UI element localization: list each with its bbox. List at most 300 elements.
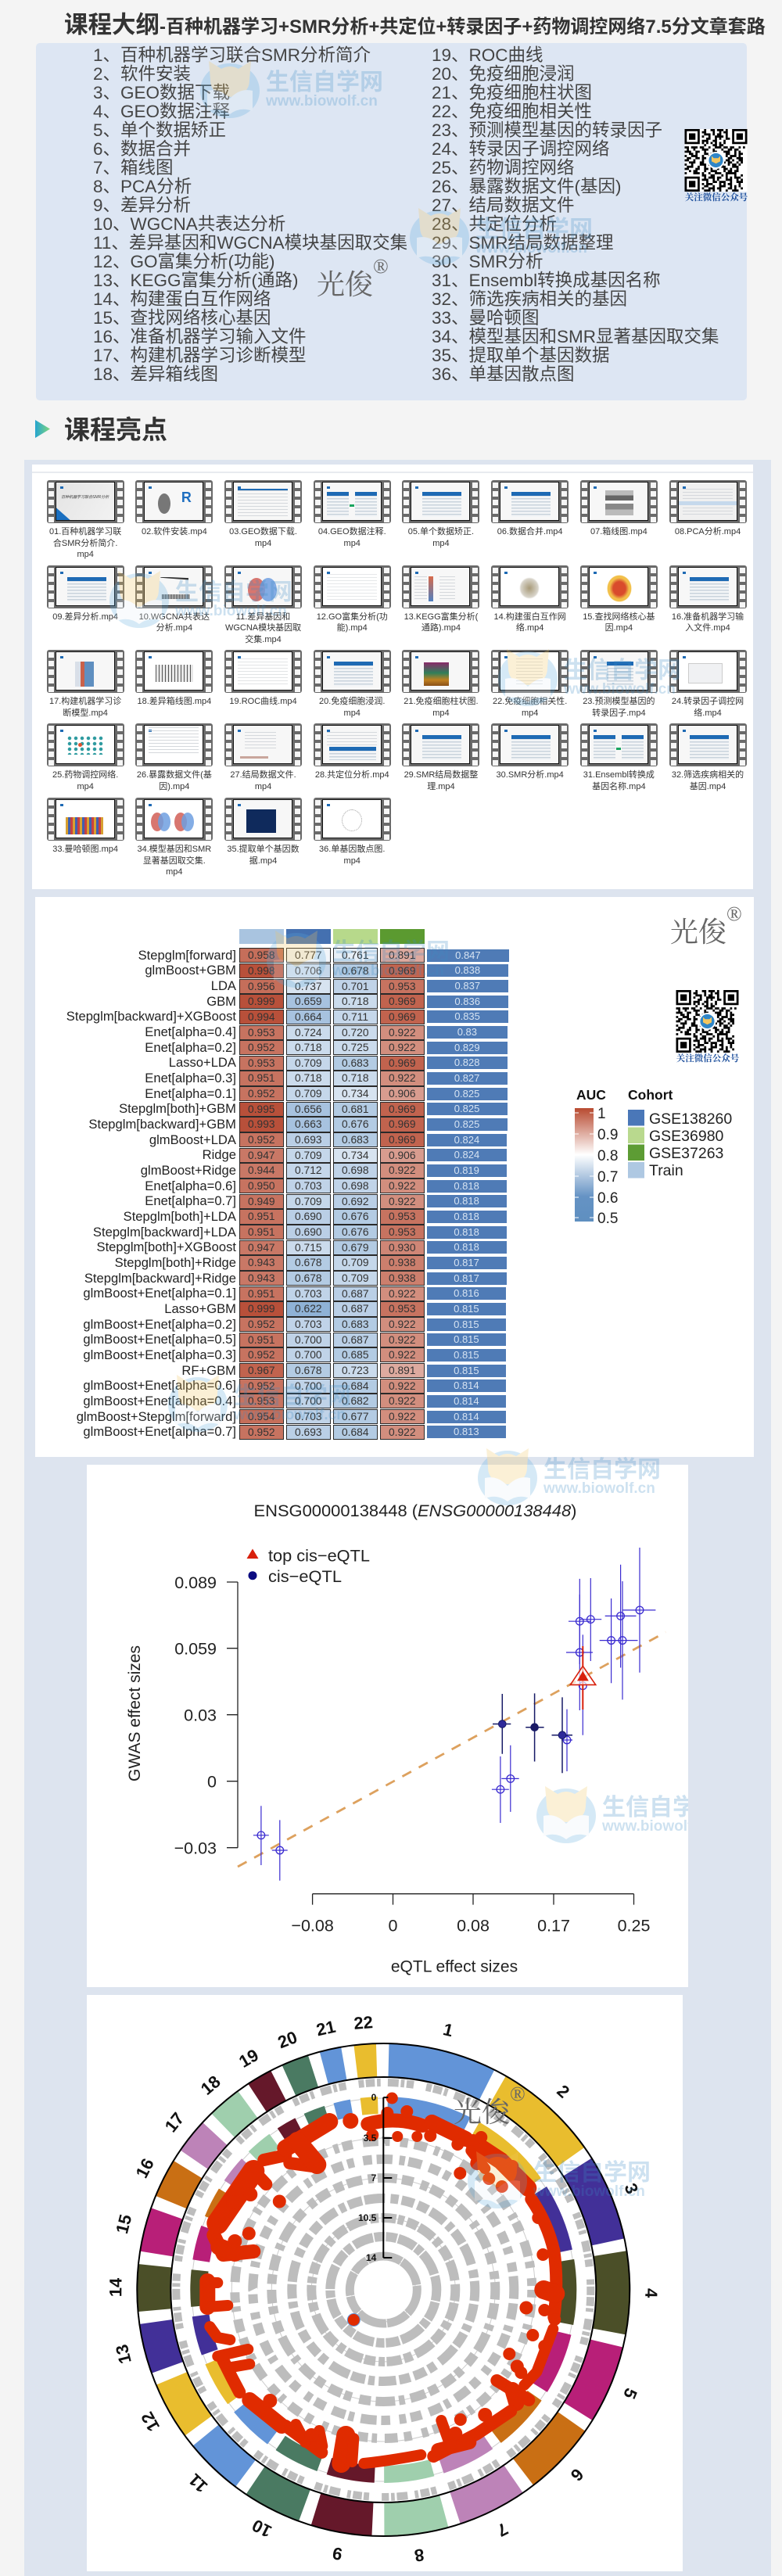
heatmap and mean AUC bars: 0.951 <box>248 1072 275 1084</box>
thumb 33: 33.曼哈顿图.mp4 <box>52 845 118 854</box>
heatmap and mean AUC bars: 0.825 <box>454 1118 479 1130</box>
heatmap and mean AUC bars: 0.720 <box>342 1027 369 1039</box>
outline list column 2: 33、曼哈顿图 <box>432 308 540 328</box>
thumb 09: 09.差异分析.mp4 <box>52 612 118 621</box>
outline list column 2: 29、SMR结局数据整理 <box>432 233 614 253</box>
thumb 08: 08.PCA分析.mp4 <box>675 527 741 536</box>
legend: AUC colour bar: 0.7 <box>597 1169 618 1186</box>
heatmap and mean AUC bars: 0.690 <box>295 1226 322 1238</box>
watermark 5: www.biowolf.cn <box>332 963 444 979</box>
heatmap and mean AUC bars: 0.818 <box>454 1241 479 1253</box>
heatmap and mean AUC bars: 0.828 <box>454 1057 479 1068</box>
watermark 7 <box>477 1444 665 1508</box>
SMR effect size scatter plot: −0.03 <box>174 1839 217 1858</box>
heatmap and mean AUC bars: 0.703 <box>295 1288 322 1300</box>
thumb 21: 21.免疫细胞柱状图. <box>404 697 479 706</box>
heatmap and mean AUC bars: 0.938 <box>389 1257 416 1268</box>
heatmap and mean AUC bars: 0.715 <box>295 1242 322 1254</box>
thumb 34: 34.模型基因和SMR <box>137 845 211 854</box>
thumb 25: 25.药物调控网络. <box>52 770 118 780</box>
thumb 12: 能).mp4 <box>337 623 368 633</box>
heatmap and mean AUC bars: RF+GBM <box>181 1363 236 1378</box>
heatmap and mean AUC bars: 0.718 <box>342 996 369 1007</box>
heatmap and mean AUC bars: 0.993 <box>248 1118 275 1130</box>
QR code: heatmap <box>676 990 740 1064</box>
watermark 8 <box>536 1781 688 1846</box>
outline list column 2: 28、共定位分析 <box>432 214 557 234</box>
heatmap and mean AUC bars: 0.958 <box>248 949 275 961</box>
outline list column 2: 22、免疫细胞相关性 <box>432 102 592 121</box>
watermark 5 <box>266 926 454 990</box>
heatmap and mean AUC bars: 0.685 <box>342 1349 369 1361</box>
circular Manhattan plot: 7 <box>371 2172 377 2183</box>
thumb 27: mp4 <box>255 782 271 791</box>
trademark: outline: 光俊 <box>317 263 373 303</box>
heatmap and mean AUC bars: 0.815 <box>454 1318 479 1330</box>
thumb 02: 02.软件安装.mp4 <box>142 527 207 536</box>
heatmap and mean AUC bars: 0.683 <box>342 1318 369 1330</box>
outline list column 2: 19、ROC曲线 <box>432 45 543 65</box>
watermark 9: 生信自学网 <box>533 2153 651 2187</box>
thumb 17 <box>47 650 124 718</box>
heatmap and mean AUC bars: 0.684 <box>342 1426 369 1438</box>
heatmap and mean AUC bars: 0.922 <box>389 1180 416 1192</box>
thumb 31: 基因名称.mp4 <box>592 782 646 791</box>
thumb 13: 13.KEGG富集分析( <box>404 612 478 621</box>
heatmap and mean AUC bars: 0.967 <box>248 1365 275 1376</box>
thumb 32: 32.筛选疾病相关的 <box>672 770 744 780</box>
legend: cohort: GSE138260 <box>649 1110 732 1128</box>
heatmap and mean AUC bars: 0.684 <box>342 1380 369 1392</box>
heatmap and mean AUC bars: 0.922 <box>389 1426 416 1438</box>
SMR effect size scatter plot: GWAS effect sizes <box>126 1645 144 1781</box>
legend: AUC colour bar: 0.5 <box>597 1211 618 1227</box>
heatmap and mean AUC bars: glmBoost+GBM <box>145 963 236 978</box>
heatmap and mean AUC bars: 0.906 <box>389 1088 416 1100</box>
heatmap and mean AUC bars: 0.969 <box>389 965 416 977</box>
legend: cohort: Cohort <box>628 1087 673 1103</box>
outline list column 1: 14、构建蛋白互作网络 <box>93 289 271 309</box>
thumb 35 <box>224 798 302 865</box>
outline list column 2: 20、免疫细胞浸润 <box>432 64 575 84</box>
heatmap and mean AUC bars: Enet[alpha=0.2] <box>145 1040 236 1055</box>
chromosome ring <box>59 1965 708 2576</box>
thumb 20 <box>314 650 391 718</box>
thumb 30: 30.SMR分析.mp4 <box>497 770 564 780</box>
panel: scatter plot <box>87 1465 688 1987</box>
thumb 19: 19.ROC曲线.mp4 <box>229 697 297 706</box>
heatmap and mean AUC bars: 0.706 <box>295 965 322 977</box>
thumb 28: 28.共定位分析.mp4 <box>315 770 389 780</box>
chromosome labels: 19 <box>235 2045 262 2072</box>
heatmap and mean AUC bars: glmBoost+Enet[alpha=0.1] <box>83 1286 236 1301</box>
heatmap and mean AUC bars: 0.943 <box>248 1257 275 1268</box>
heatmap and mean AUC bars: 0.969 <box>389 1134 416 1146</box>
thumb 23: 23.预测模型基因的 <box>583 697 655 706</box>
top cis-eQTL marker <box>570 1646 596 1710</box>
heatmap and mean AUC bars: 0.953 <box>389 1211 416 1222</box>
heatmap and mean AUC bars: 0.709 <box>342 1272 369 1284</box>
heatmap and mean AUC bars: 0.711 <box>343 1011 368 1023</box>
thumb 04: 04.GEO数据注释. <box>318 527 386 536</box>
thumb 01: 百种机器学习联合SMR分析 <box>61 495 109 500</box>
heatmap and mean AUC bars: 0.622 <box>295 1303 322 1315</box>
heatmap and mean AUC bars: 0.693 <box>295 1134 322 1146</box>
legend: AUC colour bar: AUC <box>576 1087 606 1103</box>
heatmap and mean AUC bars: 0.698 <box>342 1164 369 1176</box>
heatmap and mean AUC bars: 0.922 <box>389 1349 416 1361</box>
heatmap and mean AUC bars: 0.953 <box>248 1395 275 1407</box>
thumb 16: 16.准备机器学习输 <box>672 612 744 621</box>
outline list column 1: 13、KEGG富集分析(通路) <box>93 271 299 290</box>
legend: cis−eQTL <box>268 1567 342 1586</box>
thumb 09 <box>47 565 124 621</box>
chromosome labels: 14 <box>106 2277 125 2297</box>
heatmap and mean AUC bars: 0.952 <box>248 1349 275 1361</box>
heatmap and mean AUC bars: 0.951 <box>248 1211 275 1222</box>
chromosome labels: 4 <box>641 2288 661 2298</box>
heatmap and mean AUC bars: 0.683 <box>342 1134 369 1146</box>
thumb 30 <box>491 723 569 780</box>
heatmap and mean AUC bars: 0.952 <box>248 1088 275 1100</box>
chromosome labels: 22 <box>353 2012 374 2033</box>
heatmap and mean AUC bars: 0.891 <box>389 949 416 961</box>
thumb 01: 01.百种机器学习联 <box>49 527 121 536</box>
heatmap and mean AUC bars: 0.718 <box>295 1072 322 1084</box>
thumb 29: 理.mp4 <box>427 782 455 791</box>
thumb 18: 18.差异箱线图.mp4 <box>137 697 211 706</box>
thumb 29 <box>402 723 479 791</box>
thumb 25 <box>47 723 124 791</box>
thumb 29: 29.SMR结局数据整 <box>404 770 478 780</box>
heatmap and mean AUC bars: 0.950 <box>248 1180 275 1192</box>
video thumbnails grid <box>47 480 747 877</box>
text: ® <box>726 902 742 925</box>
watermark 6: www.biowolf.cn <box>234 1407 346 1423</box>
thumb 35: 35.提取单个基因数 <box>227 845 300 854</box>
outline list column 2: 34、模型基因和SMR显著基因取交集 <box>432 327 719 346</box>
x axis <box>313 1894 633 1905</box>
heatmap and mean AUC bars: glmBoost+Enet[alpha=0.2] <box>83 1317 236 1332</box>
heatmap and mean AUC bars: 0.700 <box>295 1349 322 1361</box>
heatmap and mean AUC bars: 0.718 <box>295 1042 322 1053</box>
circular Manhattan plot: 3.5 <box>364 2133 377 2144</box>
heatmap and mean AUC bars: 0.700 <box>295 1380 322 1392</box>
thumb 17: 断模型.mp4 <box>63 709 108 718</box>
thumb 26 <box>135 723 213 791</box>
heatmap and mean AUC bars: glmBoost+Enet[alpha=0.7] <box>83 1424 236 1439</box>
chromosome labels: 6 <box>567 2465 587 2485</box>
heatmap and mean AUC bars: Stepglm[backward]+GBM <box>88 1117 236 1132</box>
section heading icon <box>35 420 50 438</box>
legend <box>247 1547 370 1586</box>
heatmap and mean AUC bars: 0.953 <box>248 1057 275 1069</box>
chromosome labels: 3 <box>621 2180 642 2197</box>
outline list column 2: 35、提取单个基因数据 <box>432 346 610 365</box>
thumb 07: 07.箱线图.mp4 <box>590 527 647 536</box>
thumb 11: 交集.mp4 <box>245 635 282 644</box>
trademark: heatmap: 光俊 <box>670 910 726 950</box>
thumb 36: mp4 <box>344 856 361 865</box>
thumb 03: mp4 <box>255 538 271 547</box>
chromosome labels: 11 <box>185 2470 211 2496</box>
heatmap and mean AUC bars: 0.922 <box>389 1042 416 1053</box>
SMR effect size scatter plot: 0.17 <box>537 1916 570 1935</box>
heatmap and mean AUC bars: Stepglm[forward] <box>138 948 236 963</box>
heatmap and mean AUC bars: Stepglm[backward]+XGBoost <box>66 1009 236 1024</box>
heatmap and mean AUC bars: LDA <box>211 978 236 993</box>
circular Manhattan plot <box>87 1995 683 2571</box>
heatmap and mean AUC bars: 0.761 <box>342 949 369 961</box>
heatmap and mean AUC bars: 0.814 <box>454 1379 479 1391</box>
heatmap and mean AUC bars: 0.922 <box>389 1334 416 1346</box>
thumb 08 <box>669 480 747 536</box>
chromosome labels <box>106 2012 661 2566</box>
thumb 16 <box>669 565 747 633</box>
heatmap and mean AUC bars: Stepglm[both]+GBM <box>119 1101 236 1116</box>
heatmap and mean AUC bars: 0.827 <box>454 1072 479 1084</box>
thumb 22: mp4 <box>522 709 538 718</box>
outline list column 1: 4、GEO数据注释 <box>93 102 230 121</box>
heatmap and mean AUC bars: 0.952 <box>248 1134 275 1146</box>
thumb 19 <box>224 650 302 706</box>
chromosome labels: 1 <box>441 2019 455 2040</box>
watermark 2 <box>409 203 597 267</box>
QR code: outline: 关注微信公众号 <box>685 191 748 203</box>
chromosome labels: 13 <box>112 2342 135 2366</box>
heatmap and mean AUC bars: 0.951 <box>248 1334 275 1346</box>
heatmap and mean AUC bars: 0.953 <box>248 1027 275 1039</box>
heatmap and mean AUC bars: glmBoost+Ridge <box>141 1163 236 1178</box>
heatmap and mean AUC bars: 0.818 <box>454 1195 479 1207</box>
SMR effect size scatter plot: 0 <box>207 1772 217 1791</box>
SMR effect size scatter plot <box>87 1465 688 1987</box>
outline list column 2: 21、免疫细胞柱状图 <box>432 83 592 102</box>
thumb 11: WGCNA模块基因取 <box>225 623 301 633</box>
thumb 01: mp4 <box>77 550 94 559</box>
heatmap and mean AUC bars: Ridge <box>203 1147 236 1162</box>
heatmap and mean AUC bars: 0.682 <box>342 1395 369 1407</box>
heatmap and mean AUC bars: 0.818 <box>454 1211 479 1222</box>
watermark 1: 生信自学网 <box>266 63 383 97</box>
heatmap and mean AUC bars: 0.678 <box>295 1257 322 1268</box>
grey inner tracks <box>176 2083 590 2497</box>
thumb 26: 26.暴露数据文件(基 <box>137 770 212 780</box>
thumb 31: 31.Ensembl转换成 <box>583 770 655 780</box>
outline list column 2: 23、预测模型基因的转录因子 <box>432 120 662 140</box>
outline list column 1: 6、数据合并 <box>93 139 191 159</box>
outline list column 1: 16、准备机器学习输入文件 <box>93 327 307 346</box>
thumb 21: mp4 <box>432 709 450 718</box>
chromosome labels: 12 <box>137 2409 163 2434</box>
heatmap and mean AUC bars: 0.709 <box>342 1257 369 1268</box>
heatmap and mean AUC bars: 0.906 <box>389 1150 416 1161</box>
thumb 33 <box>47 798 124 854</box>
thumb 10: 10.WGCNA共表达 <box>139 612 210 621</box>
panel: model heatmap <box>35 897 754 1457</box>
chromosome labels: 8 <box>413 2545 425 2566</box>
plot title: ENSG00000138448 ( ENSG00000138448 ) <box>253 1502 577 1520</box>
heatmap and mean AUC bars: 0.815 <box>454 1333 479 1345</box>
heatmap and mean AUC bars: 0.829 <box>454 1042 480 1053</box>
heatmap and mean AUC bars: Stepglm[both]+Ridge <box>115 1255 236 1270</box>
outline list column 1 <box>93 45 407 384</box>
SMR effect size scatter plot: 0.03 <box>184 1706 217 1725</box>
thumb 27 <box>224 723 302 791</box>
outline list column 1: 18、差异箱线图 <box>93 364 218 384</box>
watermark 3 <box>109 566 296 630</box>
thumb 32: 基因.mp4 <box>690 782 726 791</box>
heatmap and mean AUC bars: 0.723 <box>342 1365 369 1376</box>
text: ® <box>510 2083 526 2105</box>
chromosome labels: 7 <box>494 2519 511 2541</box>
heatmap and mean AUC bars: 0.949 <box>248 1196 275 1207</box>
legend: top cis−eQTL <box>268 1547 370 1566</box>
heatmap and mean AUC bars: 0.709 <box>295 1088 322 1100</box>
thumb 20: 20.免疫细胞浸润. <box>319 697 385 706</box>
heatmap and mean AUC bars: 0.709 <box>295 1150 322 1161</box>
thumb 01 <box>47 480 124 559</box>
heatmap and mean AUC bars: 0.678 <box>295 1365 322 1376</box>
legend: AUC colour bar: 0.9 <box>597 1127 618 1143</box>
heatmap and mean AUC bars: glmBoost+Enet[alpha=0.3] <box>83 1347 236 1362</box>
heatmap and mean AUC bars: 0.709 <box>295 1196 322 1207</box>
heatmap and mean AUC bars: glmBoost+Stepglm[forward] <box>77 1409 236 1424</box>
watermark 6: 生信自学网 <box>234 1376 351 1411</box>
heatmap and mean AUC bars: 0.891 <box>389 1365 416 1376</box>
heatmap and mean AUC bars: Stepglm[both]+XGBoost <box>97 1240 236 1254</box>
legend: AUC colour bar <box>571 1083 630 1228</box>
error bars <box>253 1548 655 1881</box>
SMR effect size scatter plot: eQTL effect sizes <box>391 1958 518 1975</box>
significant SNP points <box>207 2120 556 2463</box>
heatmap and mean AUC bars: 0.952 <box>248 1042 275 1053</box>
QR code: heatmap: 关注微信公众号 <box>676 1052 739 1064</box>
radial axis <box>383 2097 392 2258</box>
watermark 3: 生信自学网 <box>175 572 292 607</box>
thumb 05: mp4 <box>432 538 450 547</box>
legend: cohort: GSE37263 <box>649 1145 723 1162</box>
chromosome labels: 21 <box>314 2017 337 2040</box>
heatmap and mean AUC bars: Lasso+LDA <box>169 1055 236 1070</box>
heatmap and mean AUC bars: 0.734 <box>342 1088 369 1100</box>
thumb 24: 24.转录因子调控网 <box>672 697 744 706</box>
heatmap and mean AUC bars: 0.815 <box>454 1303 479 1315</box>
outline list column 2: 25、药物调控网络 <box>432 158 575 178</box>
heatmap and mean AUC bars: 0.690 <box>295 1211 322 1222</box>
heatmap and mean AUC bars: 0.998 <box>248 965 275 977</box>
heatmap and mean AUC bars: 0.969 <box>389 1057 416 1069</box>
thumb 34: 显著基因取交集. <box>143 856 206 865</box>
heatmap and mean AUC bars: 0.817 <box>454 1257 479 1268</box>
coloured inner band <box>123 2029 644 2551</box>
thumb 05 <box>402 480 479 547</box>
thumb 22 <box>491 650 569 718</box>
chromosome labels: 17 <box>161 2108 188 2136</box>
heatmap and mean AUC bars: 0.709 <box>295 1057 322 1069</box>
thumb 14 <box>491 565 569 633</box>
heatmap and mean AUC bars: 0.825 <box>454 1103 479 1114</box>
heatmap and mean AUC bars: 0.995 <box>248 1103 275 1115</box>
thumb 04: mp4 <box>344 538 361 547</box>
panel: video list <box>32 465 753 889</box>
heatmap and mean AUC bars: Enet[alpha=0.7] <box>145 1193 236 1208</box>
chromosome labels: 2 <box>553 2081 573 2102</box>
heatmap and mean AUC bars: Enet[alpha=0.6] <box>145 1179 236 1193</box>
heatmap and mean AUC bars: glmBoost+Enet[alpha=0.6] <box>83 1378 236 1393</box>
thumb 35: 据.mp4 <box>249 856 277 865</box>
heatmap and mean AUC bars: 0.683 <box>342 1057 369 1069</box>
heatmap and mean AUC bars: 0.922 <box>389 1288 416 1300</box>
y axis <box>227 1582 238 1848</box>
watermark 5: 生信自学网 <box>332 932 450 967</box>
heatmap and mean AUC bars: 0.953 <box>389 1226 416 1238</box>
heatmap and mean AUC bars: 0.677 <box>342 1411 369 1423</box>
thumb 11: 11.差异基因和 <box>236 612 290 621</box>
heatmap and mean AUC bars: 0.944 <box>248 1164 275 1176</box>
thumb 16: 入文件.mp4 <box>685 623 730 633</box>
legend: cohort: GSE36980 <box>649 1128 724 1145</box>
thumb 36: 36.单基因散点图. <box>319 845 385 854</box>
heatmap and mean AUC bars: 0.718 <box>342 1072 369 1084</box>
thumb 28 <box>314 723 391 780</box>
heatmap and mean AUC bars: 0.922 <box>389 1411 416 1423</box>
outline list column 1: 5、单个数据矫正 <box>93 120 226 140</box>
thumb 24 <box>669 650 747 718</box>
heatmap and mean AUC bars: 0.825 <box>454 1088 479 1100</box>
heatmap and mean AUC bars: 0.956 <box>248 981 275 992</box>
ring outlines <box>137 2043 630 2536</box>
circular Manhattan plot: 10.5 <box>358 2212 377 2223</box>
heatmap and mean AUC bars: 0.663 <box>295 1118 322 1130</box>
outline list column 1: 11、差异基因和WGCNA模块基因取交集 <box>93 233 407 253</box>
heatmap and mean AUC bars: 0.969 <box>389 1118 416 1130</box>
legend: AUC colour bar: 0.6 <box>597 1190 618 1207</box>
watermark 7: www.biowolf.cn <box>543 1480 655 1497</box>
heatmap and mean AUC bars: 0.734 <box>342 1150 369 1161</box>
heatmap and mean AUC bars: Enet[alpha=0.1] <box>145 1086 236 1101</box>
legend: cohort: Train <box>649 1162 683 1179</box>
watermark 4: www.biowolf.cn <box>564 681 676 698</box>
heatmap and mean AUC bars: 0.824 <box>454 1134 479 1146</box>
heatmap and mean AUC bars: 0.725 <box>342 1042 369 1053</box>
SMR effect size scatter plot: 0.08 <box>457 1916 490 1935</box>
heatmap and mean AUC bars: 0.836 <box>454 996 480 1007</box>
heatmap and mean AUC bars: 0.952 <box>248 1318 275 1330</box>
thumb 34: mp4 <box>166 867 183 877</box>
thumb 20: mp4 <box>344 709 361 718</box>
page title: 课程大纲-百种机器学习+SMR分析+共定位+转录因子+药物调控网络7.5分文章套路 <box>64 12 766 38</box>
heatmap and mean AUC bars: 0.817 <box>454 1272 479 1284</box>
outline list column 1: 17、构建机器学习诊断模型 <box>93 346 307 365</box>
SMR effect size scatter plot: 0.25 <box>618 1916 650 1935</box>
chromosome labels: 18 <box>197 2072 224 2099</box>
SMR effect size scatter plot: 0.059 <box>174 1639 217 1658</box>
thumb 15 <box>580 565 658 633</box>
heatmap and mean AUC bars: 0.816 <box>454 1287 479 1299</box>
thumb 10 <box>135 565 213 633</box>
heatmap and mean AUC bars: 0.676 <box>342 1211 369 1222</box>
heatmap and mean AUC bars: Stepglm[both]+LDA <box>124 1209 236 1224</box>
heatmap and mean AUC bars <box>35 948 512 1440</box>
watermark 6 <box>167 1370 355 1434</box>
trademark: outline <box>317 255 389 303</box>
heatmap and mean AUC bars: 0.943 <box>248 1272 275 1284</box>
heatmap and mean AUC bars: 0.678 <box>295 1272 322 1284</box>
heatmap and mean AUC bars: 0.698 <box>342 1180 369 1192</box>
legend: AUC colour bar: 0.8 <box>597 1148 618 1164</box>
heatmap and mean AUC bars: 0.969 <box>389 996 416 1007</box>
